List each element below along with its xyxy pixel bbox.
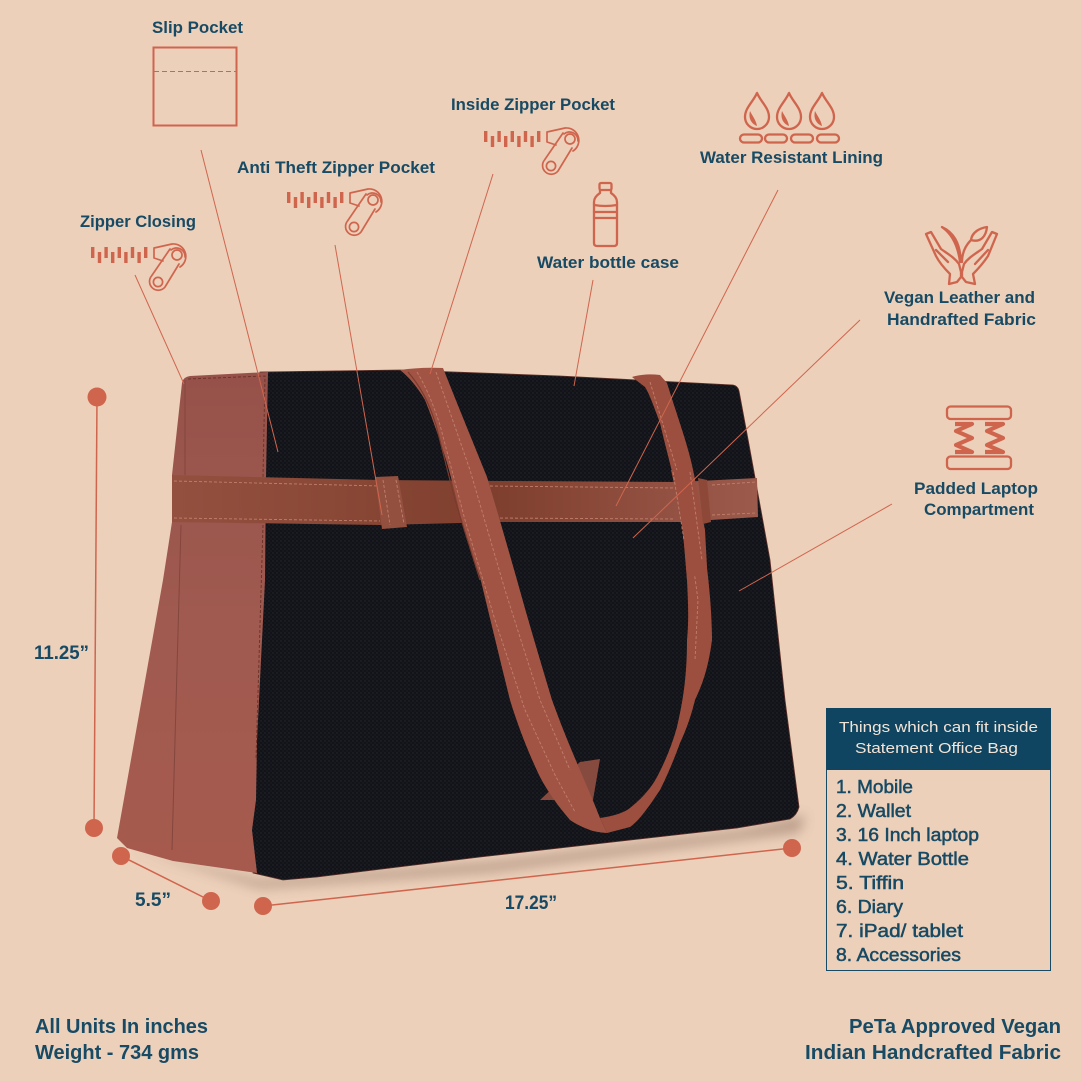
dimension: depth: 5.5” xyxy=(135,890,171,911)
icon: hands and leaves xyxy=(926,227,997,284)
list of items: 2. Wallet xyxy=(836,801,911,821)
list of items: 4. Water Bottle xyxy=(836,849,969,869)
dimension: width xyxy=(254,839,801,915)
heading: vegan leather and handrafted fabric: Handrafted Fabric xyxy=(887,311,1036,329)
icon: water drops xyxy=(740,93,839,142)
footer note: units and weight: All Units In inches xyxy=(35,1016,208,1038)
list of items: 1. Mobile xyxy=(836,777,913,797)
footer note: units and weight: Weight - 734 gms xyxy=(35,1042,199,1064)
footer note: material: Indian Handcrafted Fabric xyxy=(805,1042,1061,1064)
belt loop xyxy=(375,476,407,529)
heading: inside zipper pocket: Inside Zipper Pocket xyxy=(451,96,616,114)
left leather side panel xyxy=(117,372,268,873)
callout: water bottle case xyxy=(537,183,679,272)
strap back section xyxy=(600,374,712,833)
icon: spring padding xyxy=(947,406,1011,469)
dimension: width: 17.25” xyxy=(505,893,557,914)
heading: padded laptop compartment: Compartment xyxy=(924,501,1035,519)
callout: slip pocket xyxy=(152,19,244,126)
footer note: units and weight xyxy=(35,1016,208,1064)
strap front section xyxy=(400,368,607,833)
icon: water bottle xyxy=(594,183,617,246)
heading: vegan leather and handrafted fabric: Vegan Leather and xyxy=(884,289,1035,307)
right strap over belt xyxy=(671,470,707,580)
list of items: 5. Tiffin xyxy=(836,873,904,893)
list of items xyxy=(836,777,979,965)
list of items: 6. Diary xyxy=(836,897,903,917)
heading: padded laptop compartment: Padded Laptop xyxy=(914,480,1038,498)
icon: zipper xyxy=(91,244,186,290)
belt xyxy=(172,475,758,525)
bag shadow xyxy=(130,815,805,888)
icon: zipper xyxy=(287,189,382,235)
panel header: Things which can fit inside xyxy=(839,719,1038,736)
dimension: height xyxy=(34,388,106,837)
list of items: 8. Accessories xyxy=(836,945,961,965)
heading: padded laptop compartment xyxy=(914,480,1038,519)
icon: zipper xyxy=(484,128,579,174)
panel header xyxy=(826,708,1051,770)
panel header: Statement Office Bag xyxy=(855,740,1018,757)
leader lines xyxy=(135,150,892,591)
callout: padded laptop compartment xyxy=(914,406,1038,519)
bag photo xyxy=(117,368,805,888)
callout: vegan leather xyxy=(884,227,1036,329)
logo patch xyxy=(540,759,600,800)
panel: things which fit inside xyxy=(826,708,1051,970)
heading: water resistant lining: Water Resistant Lining xyxy=(700,149,883,167)
callout: zipper closing xyxy=(80,213,196,290)
icon: slip pocket xyxy=(154,48,236,126)
heading: zipper closing: Zipper Closing xyxy=(80,213,196,231)
heading: vegan leather and handrafted fabric xyxy=(884,289,1036,329)
callout: inside zipper pocket xyxy=(451,96,616,174)
heading: slip pocket: Slip Pocket xyxy=(152,19,244,37)
list of items: 7. iPad/ tablet xyxy=(836,921,963,941)
bag fabric body xyxy=(240,370,799,880)
heading: water bottle case: Water bottle case xyxy=(537,254,679,272)
callout: water resistant lining xyxy=(700,93,883,167)
footer note: material xyxy=(805,1016,1061,1064)
panel frame xyxy=(826,708,1050,970)
callout: anti theft zipper pocket xyxy=(237,159,436,235)
list of items: 3. 16 Inch laptop xyxy=(836,825,979,845)
heading: anti theft zipper pocket: Anti Theft Zipper Pocket xyxy=(237,159,436,177)
dimension: height: 11.25” xyxy=(34,643,89,664)
footer note: material: PeTa Approved Vegan xyxy=(849,1016,1061,1038)
dimension: depth xyxy=(112,847,220,911)
